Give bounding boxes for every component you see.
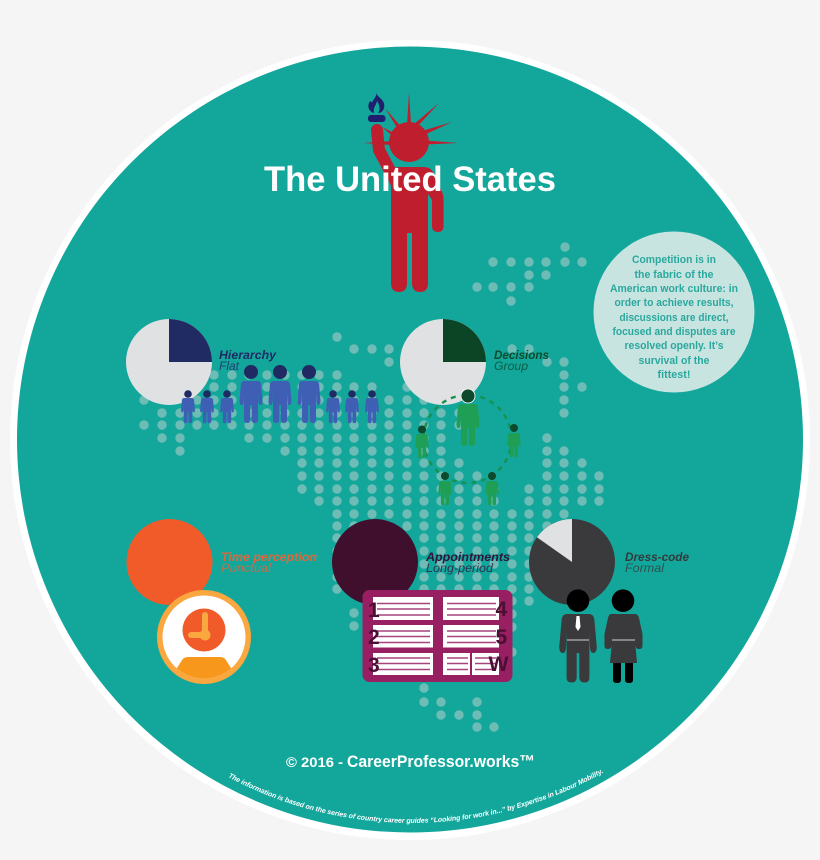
- label: appointments: Appointments: [425, 550, 510, 564]
- panel: dress-code: [529, 519, 689, 683]
- callout: competition: resolved openly. It’s: [624, 340, 724, 352]
- panel: decisions: [400, 319, 549, 505]
- label: decisions: Group: [494, 359, 528, 373]
- panel: time perception: [126, 519, 317, 685]
- callout: competition: focused and disputes are: [612, 326, 736, 338]
- icon: row of people: [181, 365, 379, 423]
- callout: competition: [594, 232, 754, 392]
- pie: decisions: [400, 319, 486, 405]
- pie: appointments: [332, 519, 418, 605]
- panel: appointments: [332, 519, 512, 682]
- callout: competition: Competition is in: [632, 254, 716, 266]
- label: hierarchy: Flat: [219, 359, 240, 373]
- callout: competition: American work culture: in: [610, 283, 738, 295]
- panel: hierarchy: [126, 319, 379, 423]
- icon: group circle of people: [415, 389, 521, 505]
- label: hierarchy: Hierarchy: [219, 348, 277, 362]
- icon: weekly planner: 3: [368, 654, 380, 677]
- icon: woman in dress: [604, 589, 642, 683]
- label: time perception: Punctual: [221, 561, 271, 575]
- pie: dress-code: [529, 519, 615, 605]
- icon: clock badge: [157, 590, 251, 685]
- copyright line: © 2016 -: [286, 754, 343, 770]
- callout: competition: the fabric of the: [634, 269, 714, 281]
- pie: hierarchy: [126, 319, 212, 405]
- callout: competition: survival of the: [638, 355, 710, 367]
- label: dress-code: Dress-code: [625, 550, 689, 564]
- label: decisions: [494, 348, 549, 373]
- copyright line: CareerProfessor.works™: [347, 752, 535, 771]
- label: time perception: Time perception: [221, 550, 317, 564]
- icon: weekly planner: W: [488, 653, 509, 676]
- icon: weekly planner: 4: [496, 598, 508, 621]
- icon: weekly planner: [362, 590, 512, 682]
- label: time perception: [221, 550, 317, 575]
- icon: Statue of Liberty figure: [363, 92, 458, 292]
- label: hierarchy: [219, 348, 277, 373]
- icon: weekly planner: 5: [496, 626, 508, 649]
- icon: man in suit: [559, 589, 597, 682]
- label: decisions: Decisions: [494, 348, 549, 362]
- label: appointments: [425, 550, 510, 575]
- icon: weekly planner: 2: [368, 626, 380, 649]
- dotted world map: [144, 247, 599, 727]
- callout: competition: fittest!: [658, 369, 690, 381]
- callout: competition: order to achieve results,: [614, 297, 734, 309]
- label: dress-code: [625, 550, 689, 575]
- label: appointments: Long-period: [426, 561, 493, 575]
- title: The United States: [264, 160, 556, 199]
- icon: weekly planner: 1: [368, 599, 380, 622]
- callout: competition: discussions are direct,: [620, 312, 728, 324]
- pie: time perception: [126, 519, 212, 605]
- label: dress-code: Formal: [625, 561, 664, 575]
- footnote on curve: The information is based on the series of country career guides “Looking for work in...” by Expertise in Labour Mobility.: [229, 770, 603, 824]
